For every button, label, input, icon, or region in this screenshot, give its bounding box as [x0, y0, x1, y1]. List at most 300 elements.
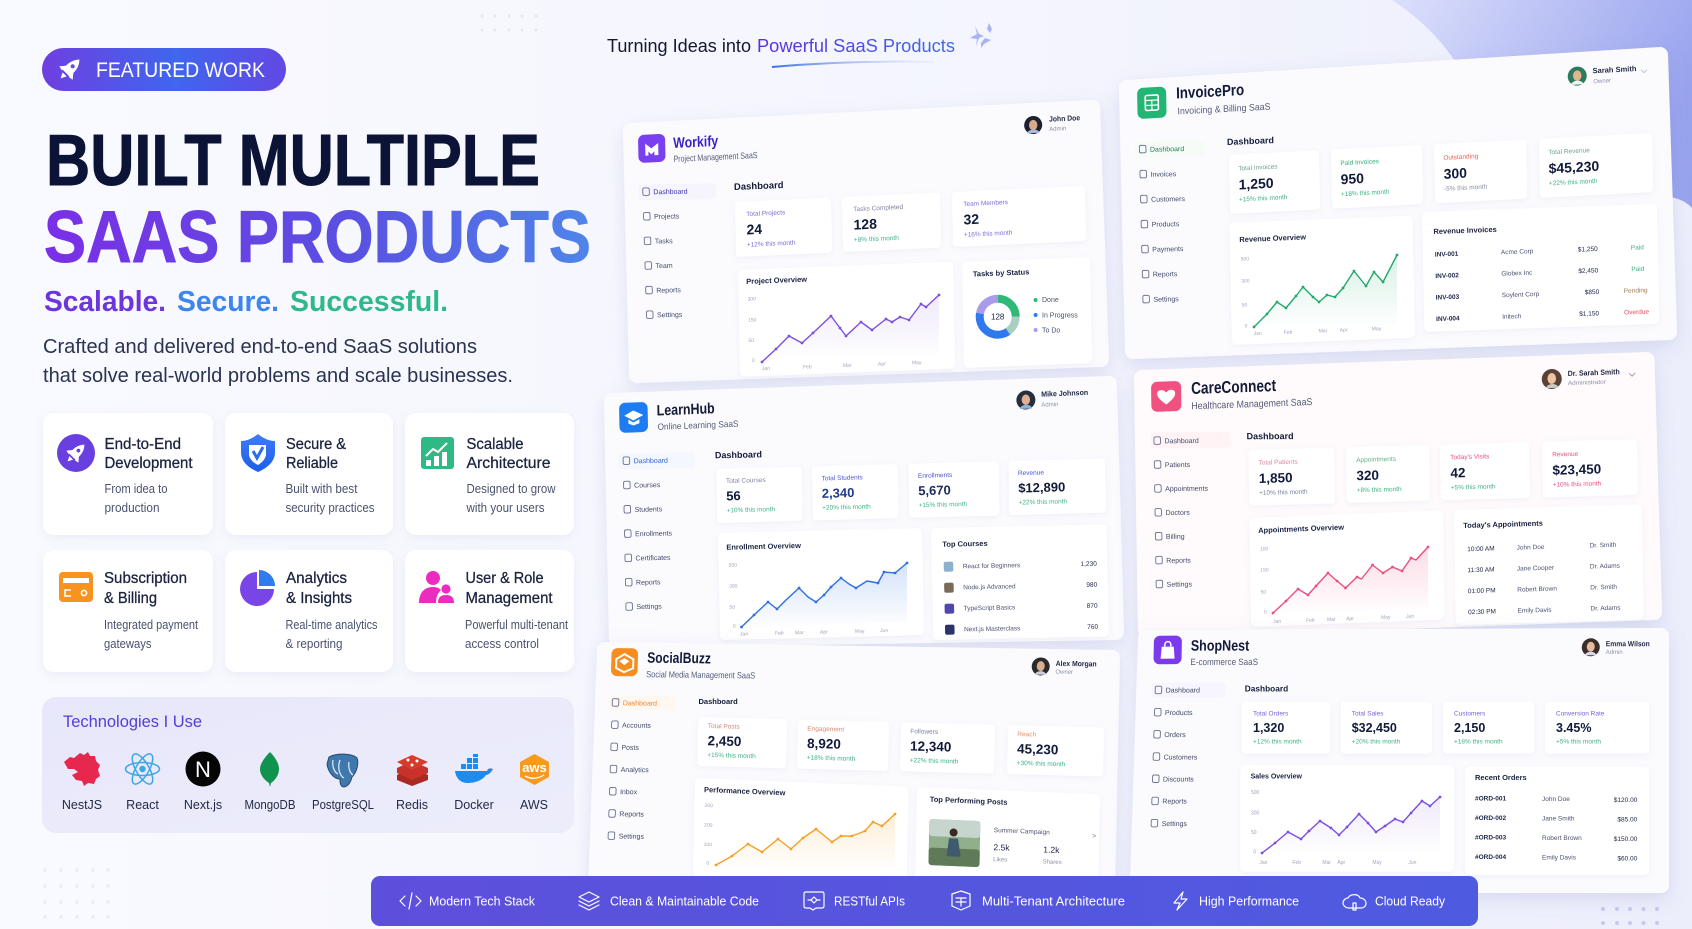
panel: Sales Overview: May — [1372, 860, 1382, 866]
text: Powerful multi-tenant — [465, 618, 568, 632]
sidebar — [605, 695, 677, 841]
tagline underline — [772, 62, 934, 67]
panel: Today's Appointments: Dr. Smith — [1590, 584, 1617, 592]
stat: Revenue: +22% this month — [1018, 498, 1068, 507]
stat: Appointments: Appointments — [1356, 456, 1397, 464]
panel: Enrollment Overview: 300 — [729, 584, 738, 590]
sidebar: Products — [1165, 710, 1193, 717]
donut chart: 128 — [991, 313, 1005, 322]
icon: Next.js — [186, 752, 220, 786]
user: Alex Morgan — [1056, 659, 1097, 668]
panel: Recent Orders: $120.00 — [1614, 797, 1638, 804]
panel: Today's Appointments: 02:30 PM — [1468, 608, 1496, 616]
panel: Revenue Invoices table: $2,450 — [1578, 267, 1599, 275]
stat: Today's Visits: +5% this month — [1451, 483, 1496, 492]
stat: Appointments: +8% this month — [1357, 486, 1402, 494]
stat: Outstanding: -5% this month — [1444, 184, 1488, 193]
sidebar: Products — [1152, 221, 1180, 229]
stat: Conversion Rate: +5% this month — [1556, 738, 1601, 745]
stat: Total Patients: Total Patients — [1259, 459, 1298, 467]
stat: Total Students: +20% this month — [822, 504, 871, 512]
panel: Top Performing Posts: Summer Campaign — [994, 827, 1050, 836]
icon: users — [419, 571, 454, 603]
stat: Enrollments: 5,670 — [918, 482, 951, 498]
text: & reporting — [286, 637, 343, 651]
text: with your users — [466, 501, 544, 515]
stat: Total Patients: +10% this month — [1259, 489, 1308, 497]
stat: Total Projects: 24 — [746, 221, 762, 237]
sidebar: Customers — [1151, 196, 1186, 204]
stat: Revenue: $12,890 — [1018, 479, 1065, 496]
stat: Revenue — [1008, 459, 1106, 515]
sidebar: Settings — [1167, 581, 1192, 589]
panel: Enrollment Overview: Jan — [740, 631, 748, 638]
panel: Recent Orders: Emily Davis — [1542, 855, 1577, 862]
panel: Enrollment Overview: Apr — [820, 629, 828, 636]
stat: Reach: 45,230 — [1017, 741, 1058, 757]
icon: code — [400, 893, 421, 909]
logo — [1153, 636, 1182, 664]
stat: Outstanding — [1434, 140, 1527, 203]
panel: Today's Appointments: Jane Cooper — [1517, 565, 1555, 573]
stat: Customers — [1443, 702, 1534, 754]
icon: shield — [241, 434, 275, 472]
panel: Revenue Overview: 0 — [1245, 323, 1248, 329]
text: End-to-End — [104, 436, 181, 453]
dots: top — [482, 16, 536, 30]
panel: Sales Overview: 0 — [1253, 849, 1256, 855]
sidebar: Dashboard — [623, 700, 657, 708]
sidebar: Reports — [1166, 558, 1191, 565]
stat: Engagement: Engagement — [807, 726, 844, 733]
stat: Tasks Completed: 128 — [853, 215, 877, 233]
panel: Recent Orders: #ORD-004 — [1475, 854, 1506, 861]
icon: Docker — [455, 754, 493, 783]
stat: Reach: +30% this month — [1017, 760, 1066, 768]
panel: Performance Overview: 300 — [704, 803, 713, 809]
sidebar: Reports — [636, 579, 661, 587]
icon: React — [126, 751, 160, 787]
heading: Dashboard — [734, 180, 784, 193]
panel: Sales Overview: Apr — [1337, 860, 1346, 866]
panel: Sales Overview: 500 — [1251, 790, 1260, 796]
stat: Customers: 2,150 — [1454, 721, 1485, 735]
panel: Project Overview: 300 — [748, 296, 756, 303]
stat: Total Revenue — [1539, 133, 1653, 198]
stat: Enrollments: Enrollments — [918, 472, 953, 480]
panel: Top Performing Posts: 1.2k — [1043, 844, 1060, 855]
user — [1024, 113, 1080, 134]
icon: rocket circle — [57, 434, 95, 472]
product name: Social Media Management SaaS — [646, 669, 755, 681]
stat: Today's Visits — [1440, 442, 1530, 500]
stat: Total Projects: +12% this month — [747, 240, 796, 249]
header — [638, 113, 1081, 166]
text — [465, 570, 568, 651]
user — [1016, 388, 1089, 410]
dashboard card: InvoicePro — [1127, 55, 1669, 351]
sidebar: Accounts — [622, 723, 651, 730]
stat: Total Courses: Total Courses — [726, 477, 767, 485]
panel: Today's Appointments: 01:00 PM — [1468, 587, 1496, 595]
panel: Today's Appointments: Dr. Adams — [1590, 563, 1621, 571]
sidebar — [619, 452, 698, 611]
label: Clean & Maintainable Code: Clean & Maintainable Code — [610, 894, 759, 908]
text: User & Role — [466, 570, 544, 587]
panel: Revenue Invoices table: $1,150 — [1579, 310, 1599, 318]
stat: Paid Invoices: 950 — [1340, 170, 1364, 187]
sidebar: Enrollments — [635, 530, 673, 538]
panel: Appointments Overview: 50 — [1261, 589, 1266, 596]
panel: Revenue Invoices table: $1,250 — [1578, 246, 1598, 254]
text: Scalable — [466, 436, 524, 453]
bottom feature bar — [371, 876, 1478, 926]
product name — [1176, 81, 1271, 117]
badge label: FEATURED WORK — [96, 58, 266, 82]
icon: sparkles — [970, 23, 992, 48]
dashboard card: Workify — [631, 108, 1101, 377]
stat: Total Courses: +10% this month — [726, 506, 776, 514]
product name — [1191, 375, 1313, 412]
panel: Revenue Overview: Jan — [1254, 331, 1262, 337]
label: Cloud Ready: Cloud Ready — [1375, 894, 1446, 908]
stat: Team Members: 32 — [963, 211, 979, 228]
label: Modern Tech Stack: Modern Tech Stack — [429, 894, 536, 908]
panel: Sales Overview: Feb — [1292, 860, 1301, 866]
product name — [646, 650, 756, 681]
sidebar: Appointments — [1165, 486, 1209, 493]
top tagline: Powerful SaaS Products — [757, 35, 955, 56]
text — [286, 570, 378, 651]
tech labels: NestJS — [62, 798, 102, 812]
tech labels: AWS — [520, 798, 548, 812]
icon: tenant — [952, 891, 970, 910]
panel: Recent Orders: Jane Smith — [1542, 816, 1575, 823]
sidebar: Settings — [636, 604, 662, 611]
heading: Dashboard — [715, 449, 762, 460]
logo — [1137, 86, 1167, 119]
stat: Total Orders: Total Orders — [1253, 710, 1289, 717]
sidebar: Discounts — [1163, 777, 1194, 783]
stat: Paid Invoices: Paid Invoices — [1340, 158, 1380, 167]
sidebar: Reports — [1162, 799, 1187, 806]
panel: Top Performing Posts: Top Performing Posts — [930, 795, 1008, 807]
donut legend — [1034, 297, 1078, 334]
stat: Engagement — [797, 720, 889, 771]
stat: Today's Visits: Today's Visits — [1450, 453, 1490, 461]
user: Owner — [1593, 78, 1611, 85]
top tagline: Turning Ideas into — [607, 35, 751, 56]
stat: Revenue — [1542, 439, 1638, 497]
panel: Project Overview: Project Overview — [746, 275, 807, 286]
sidebar: Certificates — [635, 555, 671, 562]
line chart: appointments — [1273, 547, 1428, 615]
panel: Project Overview: 150 — [748, 317, 757, 324]
text: & Billing — [104, 590, 157, 607]
text: security practices — [286, 501, 374, 515]
panel: Top Performing Posts: > — [1092, 833, 1096, 840]
panel: Appointments Overview: Appointments Overview — [1258, 523, 1344, 535]
stat: Total Students: Total Students — [821, 474, 864, 482]
stat: Revenue: +10% this month — [1553, 480, 1602, 489]
panel: Sales Overview: 50 — [1251, 830, 1257, 836]
text: gateways — [104, 637, 152, 651]
product name: LearnHub — [657, 400, 715, 419]
panel heading: Technologies I Use — [63, 712, 202, 731]
panel: Appointments Overview: 150 — [1260, 567, 1269, 574]
panel: Revenue Invoices table: Revenue Invoices — [1433, 225, 1497, 236]
stat: Total Orders — [1242, 702, 1330, 754]
icon: layers — [579, 892, 599, 910]
stat: Followers — [900, 722, 995, 774]
sidebar: Tasks — [655, 238, 673, 245]
line chart: enrollment — [742, 563, 907, 629]
stat: Team Members: Team Members — [963, 199, 1009, 208]
sidebar: Inbox — [620, 789, 638, 796]
panel: Top Courses: 870 — [1087, 603, 1098, 610]
donut legend: To Do — [1042, 328, 1060, 334]
tech labels: React — [126, 798, 159, 812]
panel: Enrollment Overview: Mar — [795, 630, 804, 636]
panel: Top Performing Posts: 2.5k — [993, 842, 1010, 853]
panel: Revenue Invoices table: Globex Inc — [1501, 270, 1533, 278]
sidebar: Settings — [619, 834, 645, 841]
stat: Total Invoices: +15% this month — [1239, 194, 1288, 204]
sidebar: Dashboard — [653, 189, 688, 196]
panel: Tasks by Status: Tasks by Status — [973, 267, 1029, 279]
stat: Team Members — [952, 186, 1086, 247]
dots: bottom left — [45, 870, 108, 917]
panel: Top Courses: React for Beginners — [963, 562, 1021, 570]
icon: NestJS — [64, 752, 100, 786]
stat: Total Orders: 1,320 — [1253, 721, 1284, 735]
panel: Top Courses: 1,230 — [1080, 561, 1097, 568]
header — [1151, 363, 1635, 414]
panel: Today's Appointments: Emily Davis — [1517, 607, 1552, 615]
logo — [611, 648, 638, 676]
panel: Sales Overview: Mar — [1322, 860, 1331, 866]
header — [1137, 61, 1648, 119]
stat: Total Invoices: 1,250 — [1238, 175, 1274, 193]
tech labels: Next.js — [184, 798, 222, 812]
tech labels — [62, 798, 548, 812]
product name: CareConnect — [1191, 376, 1277, 398]
text — [466, 436, 556, 515]
sidebar — [1135, 141, 1208, 304]
sidebar: Analytics — [621, 767, 649, 774]
panel: Performance Overview: 200 — [704, 822, 713, 829]
feature: Secure & Reliable — [225, 413, 393, 535]
tagline: Secure. — [177, 286, 279, 318]
panel: Revenue Invoices table: Soylent Corp — [1502, 291, 1540, 299]
user: Admin — [1049, 126, 1066, 133]
sidebar: Posts — [621, 745, 639, 752]
heading: Dashboard — [1227, 135, 1274, 147]
panel: Sales Overview: 300 — [1251, 810, 1260, 816]
label: Multi-Tenant Architecture: Multi-Tenant Architecture — [982, 894, 1125, 908]
panel: Top Performing Posts: Shares — [1043, 859, 1062, 866]
heading: Dashboard — [698, 697, 738, 706]
icon: card — [59, 572, 93, 602]
product name — [1190, 638, 1259, 667]
icon: AWS: aws — [522, 760, 547, 775]
dashboard card: SocialBuzz — [596, 648, 1112, 892]
panel: Revenue Overview: Apr — [1340, 327, 1348, 334]
line chart: projects — [762, 295, 939, 362]
panel: Recent Orders: $85.00 — [1617, 817, 1638, 824]
panel: Appointments Overview: 0 — [1264, 609, 1267, 615]
tagline — [44, 286, 448, 318]
stat: Total Students: 2,340 — [822, 485, 855, 501]
sidebar: Settings — [657, 312, 683, 319]
panel: Enrollment Overview: May — [855, 629, 865, 635]
sidebar: Invoices — [1150, 171, 1177, 179]
stat: Revenue: $23,450 — [1552, 461, 1601, 478]
tech labels: Docker — [454, 798, 494, 812]
user — [1542, 366, 1635, 389]
sidebar: Payments — [1152, 246, 1184, 254]
logo — [638, 134, 666, 163]
panel: Top Courses: TypeScript Basics — [964, 604, 1016, 612]
panel: Revenue Invoices table: INV-004 — [1436, 315, 1460, 323]
sidebar: Projects — [654, 213, 680, 221]
text: Built with best — [286, 482, 358, 496]
text: Architecture — [466, 455, 551, 472]
product name: SocialBuzz — [647, 650, 711, 667]
heading: Dashboard — [1246, 431, 1294, 441]
product name: Project Management SaaS — [673, 150, 758, 164]
stat: Total Sales: +20% this month — [1352, 738, 1401, 745]
text: Analytics — [286, 570, 347, 587]
panel: Top Courses — [931, 524, 1109, 640]
panel: Top Courses: Top Courses — [942, 539, 988, 549]
stat: Conversion Rate: 3.45% — [1556, 721, 1591, 735]
stat: Total Courses: 56 — [726, 488, 741, 503]
feature: Analytics & Insights — [225, 550, 393, 672]
stat: Outstanding: 300 — [1443, 165, 1467, 182]
donut legend: Done — [1042, 297, 1059, 304]
tagline: Successful. — [290, 286, 448, 318]
title: line one: BUILT MULTIPLE — [46, 120, 540, 201]
panel: Revenue Overview: 300 — [1241, 278, 1250, 285]
sidebar: Team — [655, 263, 673, 270]
sidebar — [1150, 432, 1233, 589]
text: Development — [104, 455, 193, 472]
panel: Today's Appointments: 10:00 AM — [1467, 545, 1495, 553]
panel: Today's Appointments: Dr. Adams — [1590, 605, 1621, 613]
panel: Revenue Invoices table: INV-001 — [1435, 251, 1459, 259]
product name: InvoicePro — [1176, 82, 1245, 102]
heading: Dashboard — [1245, 684, 1288, 694]
feature: User & Role Management — [405, 550, 574, 672]
text: production — [104, 501, 160, 515]
panel: Recent Orders: Robert Brown — [1542, 835, 1582, 842]
panel: Enrollment Overview: 0 — [733, 624, 736, 630]
stat: Total Sales: $32,450 — [1352, 721, 1397, 735]
dashboard card: CareConnect — [1142, 360, 1654, 630]
text — [104, 436, 193, 515]
stat: Followers: +22% this month — [910, 757, 959, 765]
stat: Appointments: 320 — [1356, 468, 1379, 483]
stat: Total Invoices: Total Invoices — [1238, 163, 1278, 173]
icon: rocket — [54, 53, 86, 85]
stat: Total Students — [812, 464, 899, 520]
stat: Total Posts: +15% this month — [707, 752, 756, 760]
text: Designed to grow — [466, 482, 556, 496]
sidebar — [1148, 683, 1226, 828]
product name — [673, 131, 758, 164]
sidebar: Billing — [1166, 534, 1185, 541]
icon: cloud — [1343, 895, 1366, 910]
panel: Project Overview: Apr — [878, 361, 886, 368]
panel: Revenue Invoices table: INV-002 — [1435, 272, 1459, 280]
logo — [619, 402, 648, 433]
panel: Recent Orders: $150.00 — [1614, 836, 1638, 843]
user: Emma Wilson — [1606, 639, 1650, 648]
text: Reliable — [286, 455, 338, 472]
stat: Total Invoices — [1229, 150, 1320, 214]
product name — [657, 399, 739, 432]
panel: Revenue Overview: 500 — [1241, 256, 1249, 263]
panel: Enrollment Overview: Jun — [880, 628, 888, 634]
stats row — [1248, 439, 1638, 506]
stat: Total Posts: Total Posts — [708, 723, 740, 731]
product name: ShopNest — [1191, 638, 1249, 655]
panel: Revenue Invoices table: Paid — [1631, 244, 1644, 252]
title: line two: SAAS PRODUCTS — [44, 197, 591, 278]
panel: Revenue Invoices table: Acme Corp — [1501, 248, 1534, 256]
stat: Conversion Rate: Conversion Rate — [1556, 710, 1605, 717]
stat: Revenue: Revenue — [1552, 451, 1579, 458]
dashboard card: ShopNest — [1138, 635, 1661, 885]
icon: pie chart — [240, 570, 275, 606]
panel: Appointments Overview — [1250, 510, 1445, 627]
panel: Sales Overview: Jan — [1259, 860, 1268, 866]
panel: Project Overview: Mar — [843, 363, 852, 369]
donut legend: In Progress — [1042, 312, 1078, 320]
header — [619, 384, 1089, 433]
panel: Recent Orders — [1465, 767, 1649, 875]
user: Mike Johnson — [1041, 388, 1089, 399]
panel: Revenue Overview: Feb — [1284, 330, 1293, 336]
tech labels: MongoDB — [244, 798, 296, 812]
stats row — [1242, 702, 1649, 754]
panel: technologies — [42, 697, 574, 833]
user — [1031, 657, 1097, 676]
stat: Followers: Followers — [910, 728, 939, 736]
sidebar: Courses — [634, 482, 661, 490]
panel: Performance Overview — [693, 778, 908, 892]
panel: Revenue Overview: May — [1372, 326, 1382, 332]
panel: Appointments Overview: Apr — [1346, 616, 1354, 622]
panel: Project Overview: 50 — [748, 338, 754, 344]
stat: Tasks Completed: +8% this month — [854, 235, 899, 244]
product name: E-commerce SaaS — [1190, 657, 1258, 667]
panel: Revenue Overview: Revenue Overview — [1239, 232, 1306, 244]
panel: Today's Appointments: 11:30 AM — [1467, 566, 1495, 574]
top-right lavender blob — [1392, 0, 1692, 208]
panel: Sales Overview: Jun — [1408, 860, 1417, 866]
stat: Outstanding: Outstanding — [1443, 153, 1479, 162]
sidebar: Settings — [1153, 296, 1179, 304]
sidebar: Students — [635, 506, 663, 514]
text — [104, 570, 198, 651]
panel: Recent Orders: $60.00 — [1617, 856, 1638, 863]
text: & Insights — [286, 590, 352, 607]
text — [286, 436, 374, 515]
icon: lightning — [1174, 892, 1187, 910]
panel: Project Overview: May — [912, 360, 922, 366]
